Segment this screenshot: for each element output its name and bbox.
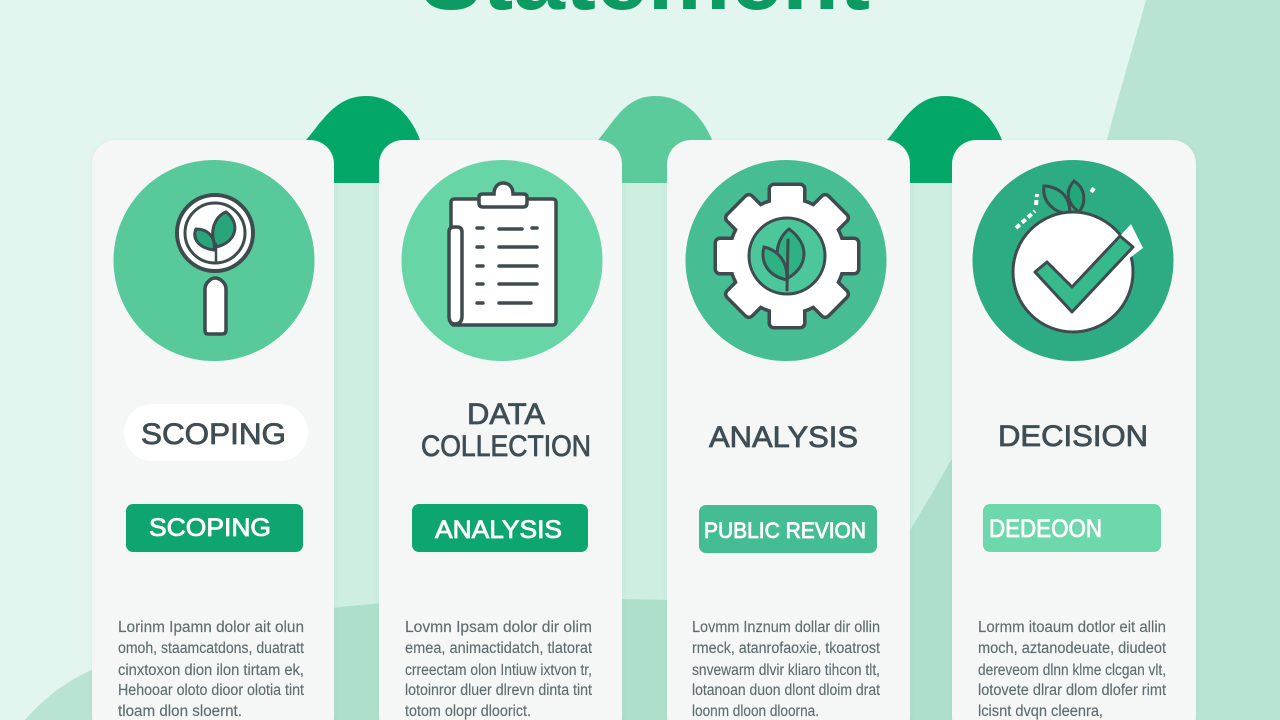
text block: data collection: emea, animactidatch, tlatorat [405,640,593,657]
icon: magnifier with leaves [114,160,314,361]
button: public review: PUBLIC REVION [704,518,866,543]
heading: data collection: COLLECTION [421,430,591,463]
icon: gear with leaf [686,160,886,361]
connector arch 2 [598,96,712,183]
panel: scoping [92,140,334,720]
panel: data collection [379,140,622,720]
text block: scoping: omoh, staamcatdons, duatratt [118,640,305,657]
text block: data collection: crreectam olon Intiuw ixtvon tr, [405,662,592,679]
text block: scoping: cinxtoxon dion ilon tirtam ek, [118,662,304,679]
icon: check with leaves [972,160,1174,361]
text block: scoping: Lorinm Ipamn dolor ait olun [118,619,304,636]
panel: analysis [667,140,910,720]
text block: analysis: Lovmm Inznum dollar dir ollin [692,619,880,636]
text block: scoping [118,619,305,720]
pill: scoping heading [124,404,308,461]
text block: data collection [405,619,593,720]
text block: data collection: totom olopr dloorict. [405,703,531,720]
text block: decision [978,619,1167,720]
button: analysis: ANALYSIS [435,516,562,544]
text block: analysis: loonm dloon dloorna. [692,703,819,720]
connector arch 1 [306,96,420,183]
text block: decision: dereveom dlnn klme clcgan vlt, [978,662,1166,679]
text block: decision: Lormm itoaum dotlor eit allin [978,619,1166,636]
text block: decision: lotovete dlrar dlom dlofer rimt [978,682,1167,699]
text block: analysis: rmeck, atanrofaoxie, tkoatrost [692,640,881,657]
text block: data collection: Lovmn Ipsam dolor dir olim [405,619,592,636]
connector arch 3 [887,96,1002,183]
text block: decision: moch, aztanodeuate, diudeot [978,640,1167,657]
pill: scoping heading: SCOPING [141,418,286,451]
heading: analysis: ANALYSIS [709,421,858,454]
text block: decision: lcisnt dvqn cleenra, [978,703,1103,720]
button: public review [699,505,877,553]
text block: analysis: snvewarm dlvir kliaro tihcon tlt, [692,662,880,679]
button: analysis [412,504,588,552]
text block: analysis: lotanoan duon dlont dloim drat [692,682,881,699]
button: decision [983,504,1161,552]
button: scoping: SCOPING [149,514,271,542]
heading: data collection [421,398,591,463]
button: scoping [126,504,303,552]
text block: data collection: lotoinror dluer dlrevn dinta tint [405,682,593,699]
button: decision: DEDEOON [989,515,1102,543]
heading: data collection: DATA [467,398,545,431]
heading: decision: DECISION [998,420,1148,453]
text block: scoping: Hehooar oloto dioor olotia tint [118,682,305,699]
panel: decision [952,140,1196,720]
icon: clipboard [402,160,602,361]
connector strips [334,183,952,720]
text block: scoping: tloam dlon sloernt. [118,703,242,720]
text block: analysis [692,619,881,720]
